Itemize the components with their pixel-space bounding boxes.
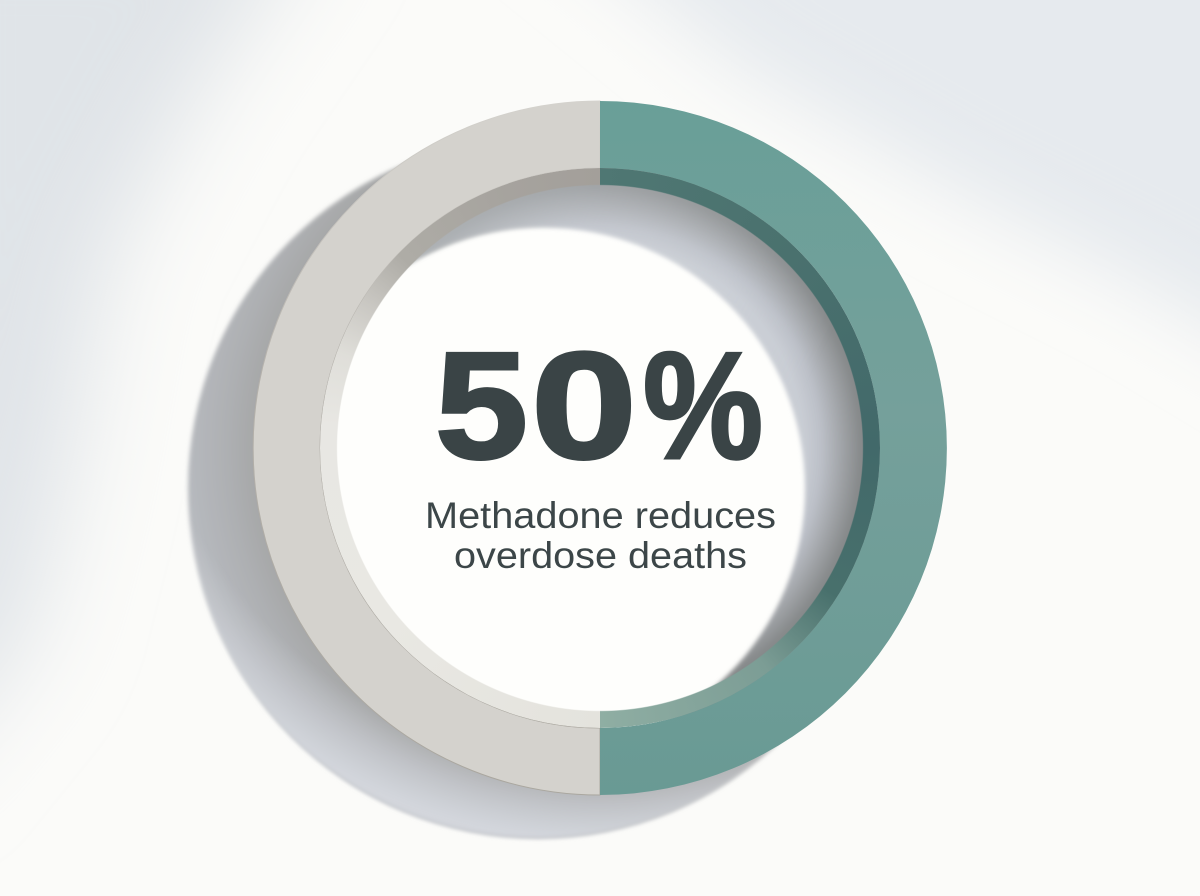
gray segment: [253, 101, 600, 795]
cast shadow of ring: [186, 163, 880, 841]
caption: [425, 495, 776, 576]
teal segment: [600, 101, 947, 795]
big statistic: 5: [435, 321, 528, 491]
big statistic: 0: [531, 321, 637, 491]
lit wall seen through the ring: [336, 184, 864, 712]
caption: overdose deaths: [454, 535, 747, 576]
big statistic: %: [643, 321, 763, 491]
big statistic: [435, 321, 763, 491]
inner bevel: [320, 168, 880, 728]
caption: Methadone reduces: [425, 495, 776, 536]
donut ring chart: 50%: [253, 100, 947, 796]
